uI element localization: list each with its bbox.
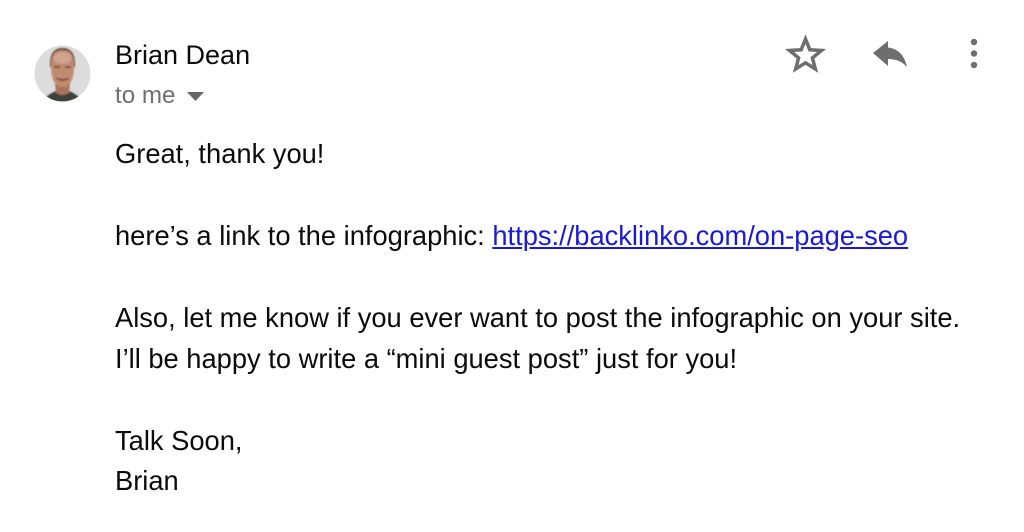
recipient line with dropdown: to me — [115, 82, 176, 109]
avatar: Brian Dean portrait — [34, 46, 90, 102]
greeting: Great, thank you! — [115, 138, 324, 169]
sign-off: Talk Soon, — [115, 425, 242, 456]
infographic link line: here’s a link to the infographic: https://backlinko.com/on-page-seo — [115, 220, 908, 251]
icon: more menu dots — [970, 38, 978, 68]
offer paragraph: I’ll be happy to write a “mini guest post” just for you! — [115, 343, 737, 374]
offer paragraph: Also, let me know if you ever want to post the infographic on your site. — [115, 302, 960, 333]
icon: star — [785, 34, 826, 73]
offer paragraph — [115, 302, 960, 374]
icon: reply arrow — [873, 41, 907, 67]
signature: Brian — [115, 465, 179, 496]
icon: dropdown arrow — [187, 92, 204, 101]
sender name: Brian Dean — [115, 40, 250, 70]
